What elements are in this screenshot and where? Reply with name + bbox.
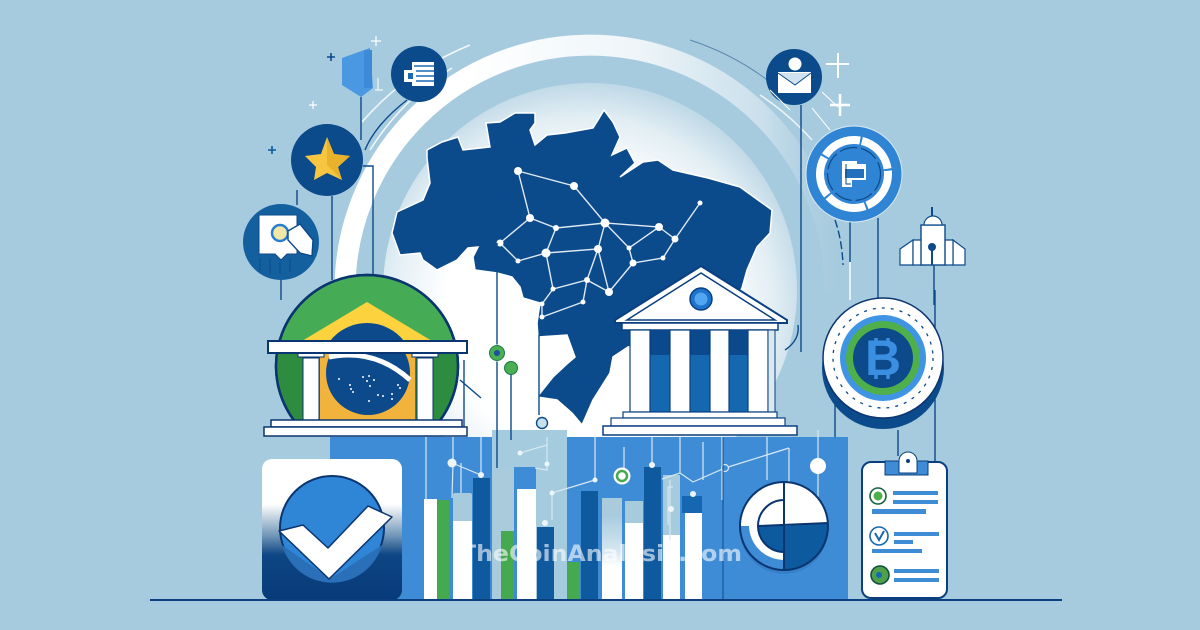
small green and outline markers bbox=[489, 345, 548, 428]
pale backing column bbox=[492, 430, 567, 600]
flag disc bbox=[274, 274, 460, 420]
icon: blue tag bbox=[309, 36, 383, 109]
bank with Brazilian flag bbox=[264, 275, 467, 457]
columns bbox=[303, 358, 433, 420]
base bbox=[271, 420, 462, 427]
check mark tile bbox=[262, 459, 402, 600]
chart trend lines and nodes bbox=[426, 430, 826, 600]
checklist row 2 bbox=[870, 527, 939, 553]
icon: hand on document circle bbox=[243, 204, 319, 280]
network lines and nodes bbox=[496, 167, 702, 320]
bank building bbox=[603, 266, 797, 435]
coin letter: B bbox=[865, 330, 901, 386]
pie chart bbox=[740, 482, 828, 574]
bar chart bbox=[424, 467, 702, 600]
checklist row 1 bbox=[870, 488, 938, 514]
baseline bbox=[150, 599, 1062, 601]
icon: star circle bbox=[268, 124, 363, 196]
icon: crypto coin bbox=[822, 298, 944, 429]
blue backing panel bbox=[330, 437, 848, 600]
map of Brazil with network bbox=[392, 110, 772, 425]
sparkles bbox=[770, 53, 850, 130]
icon: clipboard checklist bbox=[862, 452, 947, 598]
icon: mail circle bbox=[766, 49, 822, 105]
icon: church bbox=[900, 207, 965, 265]
watermark: TheCoinAnalysis.com bbox=[460, 542, 742, 567]
icon: blue gear circle bbox=[806, 126, 902, 222]
icon: document circle bbox=[391, 46, 447, 102]
beam bbox=[268, 341, 467, 353]
infographic scene bbox=[150, 34, 1062, 601]
halo arcs behind the map bbox=[345, 40, 835, 497]
connector lines bbox=[281, 97, 935, 600]
checklist row 3 bbox=[871, 566, 939, 584]
